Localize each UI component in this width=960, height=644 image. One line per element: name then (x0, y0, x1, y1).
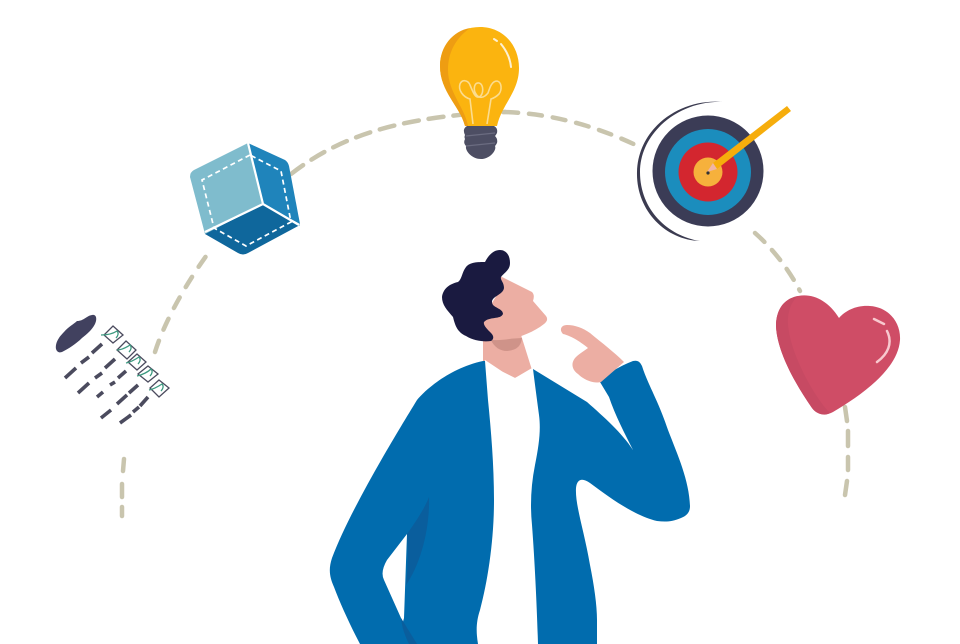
bulb glass (440, 27, 519, 126)
dashed arc path (122, 112, 848, 516)
arrow tip (707, 163, 717, 172)
icon: heart (776, 295, 900, 415)
right jacket (531, 361, 690, 644)
bulb base (464, 126, 497, 159)
arrow shaft (713, 106, 791, 169)
heart body (776, 295, 900, 414)
heart shadow side (776, 296, 830, 415)
cube right face (248, 143, 300, 224)
base ridges (466, 133, 495, 146)
person (330, 250, 690, 644)
highlight (874, 319, 890, 362)
outer swoosh (637, 102, 723, 241)
hair (442, 250, 510, 341)
check boxes (104, 326, 169, 397)
list lines (65, 344, 148, 423)
shirt (470, 360, 634, 644)
filament (460, 81, 501, 124)
cube bottom face (205, 204, 300, 254)
cube edges (205, 143, 299, 232)
face (482, 276, 547, 340)
cube left face (190, 143, 263, 234)
left jacket (330, 361, 494, 644)
icon: light bulb (440, 27, 519, 159)
bulb shadow side (440, 28, 470, 126)
neck shadow (491, 338, 522, 351)
dashed stitches (202, 155, 291, 246)
neck (483, 325, 532, 378)
hand (561, 325, 624, 383)
target rings (652, 116, 764, 226)
icon: target with arrow (637, 102, 791, 241)
jacket lower fold (401, 618, 417, 644)
jacket fold (406, 497, 429, 585)
icon: checklist (56, 315, 169, 423)
hat blob (56, 315, 96, 352)
icon: cube (190, 143, 300, 254)
check marks (101, 331, 163, 391)
highlight (494, 39, 511, 67)
